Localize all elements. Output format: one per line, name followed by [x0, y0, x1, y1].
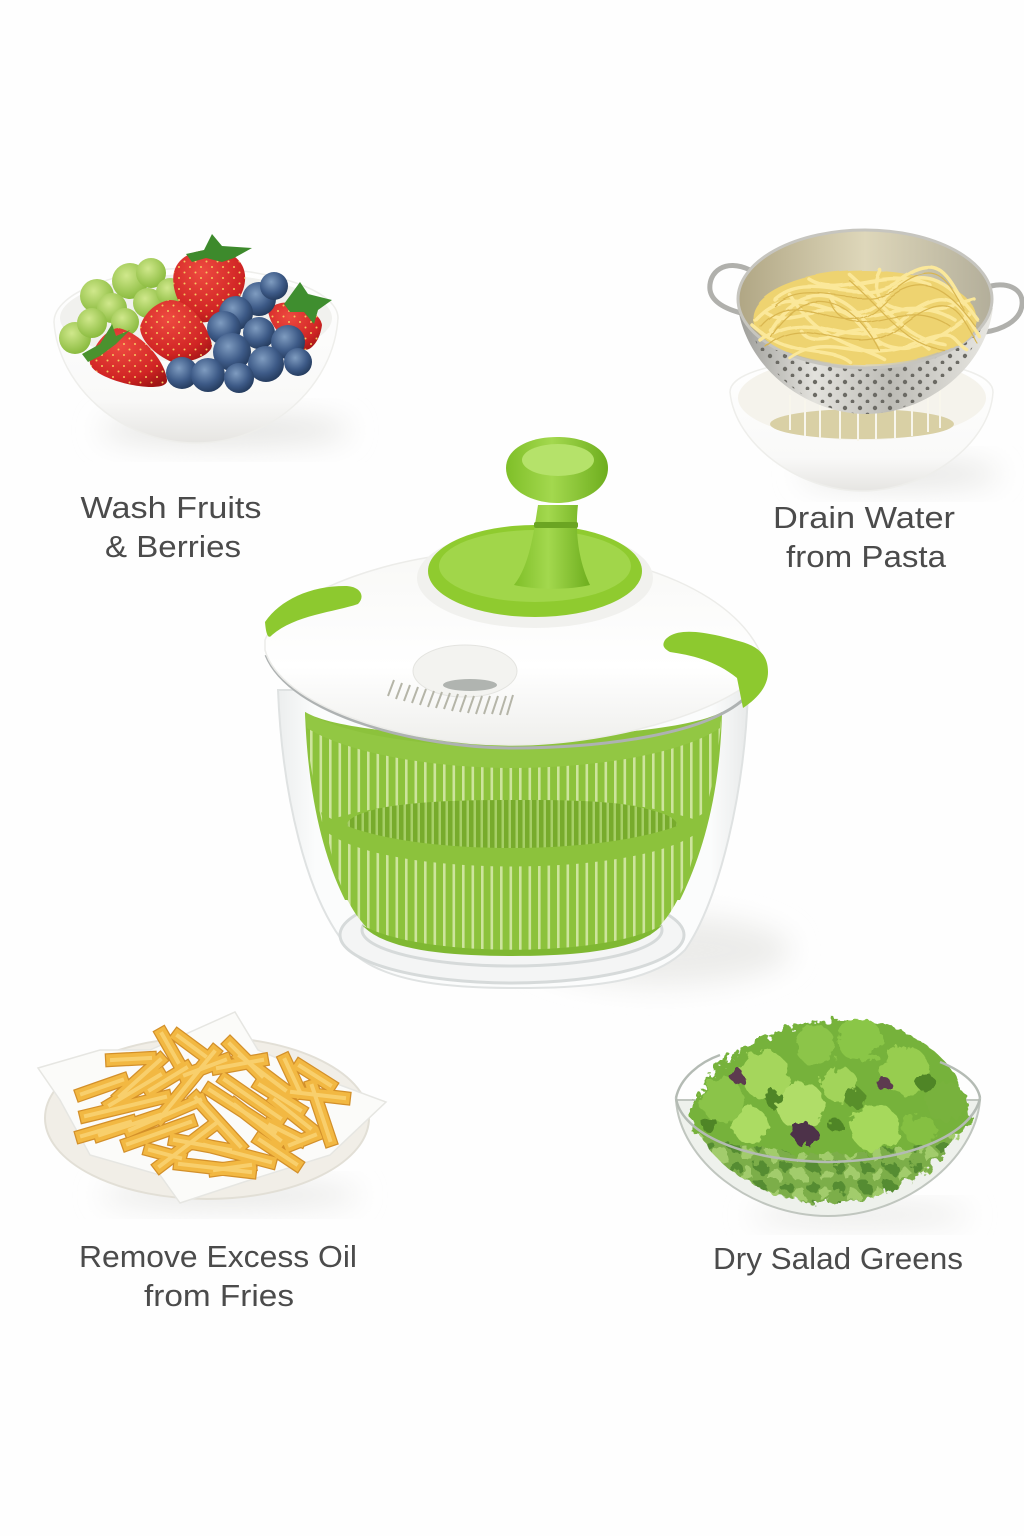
icon: glass bowl body: [676, 1100, 980, 1216]
icon: white plate: [45, 1037, 369, 1199]
icon: colander handles: [710, 266, 1022, 332]
icon: bowl inner rim: [60, 274, 332, 362]
icon: white lid: [265, 550, 765, 745]
icon: top rim band: [305, 712, 722, 768]
icon: clear outer bowl: [278, 690, 748, 988]
icon: lower ribs: [327, 832, 698, 952]
icon: lid vent slots: [388, 680, 513, 715]
icon: spaghetti: [752, 267, 978, 365]
text: remove excess oil label: Remove Excess Oil: [79, 1239, 357, 1274]
icon: middle solid band: [321, 812, 705, 872]
text: drain water label: Drain Water: [773, 500, 955, 535]
icon: lid pour spout: [413, 645, 517, 697]
text: drain water label: from Pasta: [786, 539, 947, 574]
panel: dry salad greens: [676, 1018, 980, 1276]
icon: shadow under pasta bowl: [800, 460, 1000, 488]
icon: water drips: [790, 390, 940, 441]
panel: wash fruits and berries: [54, 234, 350, 564]
icon: strawberry right leaves: [284, 282, 332, 324]
icon: basket back wall: [305, 712, 722, 900]
icon: lid disc recess: [417, 528, 653, 628]
icon: shadow under plate: [100, 1183, 360, 1207]
icon: lettuce pile: [690, 1018, 970, 1154]
icon: blueberries: [166, 272, 312, 393]
icon: clear bowl base: [340, 887, 684, 983]
icon: bowl rim ring: [266, 655, 748, 748]
icon: right green clip: [663, 632, 768, 708]
text: remove excess oil label: from Fries: [144, 1278, 294, 1313]
icon: basket inner floor: [347, 797, 677, 853]
icon: bowl inner: [738, 356, 986, 440]
icon: fries: [82, 1034, 344, 1172]
icon: white catch bowl: [730, 358, 993, 491]
panel: remove excess oil from fries: [38, 1012, 386, 1313]
icon: knob highlight: [522, 444, 594, 476]
icon: stem collar: [534, 522, 578, 528]
icon: upper ribs: [305, 712, 722, 822]
icon: glass rim: [676, 1055, 980, 1162]
icon: pump knob stem: [514, 505, 590, 589]
icon: green grapes: [59, 258, 184, 354]
icon: colander rim: [738, 230, 992, 368]
icon: white fruit bowl: [54, 268, 338, 443]
icon: strawberry top: [173, 250, 245, 322]
icon: shadow under fruit bowl: [100, 414, 350, 446]
icon: basket bottom rim: [362, 925, 662, 956]
icon: disc highlight: [439, 530, 631, 602]
icon: strawberry leaves top: [186, 234, 252, 262]
icon: strawberry front leaves: [82, 324, 130, 362]
infographic canvas: [37, 228, 1024, 1306]
icon: spinner shadow: [530, 915, 790, 985]
text: wash fruits label: Wash Fruits: [80, 490, 262, 525]
icon: steel colander body: [738, 308, 993, 414]
icon: greens through glass: [700, 1130, 960, 1203]
icon: left green clip: [265, 586, 362, 637]
icon: colander perforations: [756, 330, 981, 414]
text: dry salad greens label: Dry Salad Greens: [713, 1241, 963, 1276]
text: wash fruits label: [80, 490, 262, 564]
icon: strawberry centre: [140, 300, 212, 362]
panel: salad spinner product: [265, 437, 790, 988]
icon: strawberry right: [268, 302, 322, 350]
panel: drain water from pasta: [710, 230, 1022, 574]
icon: strawberry front: [90, 328, 167, 387]
icon: shadow under glass bowl: [750, 1205, 970, 1225]
icon: pump knob head: [506, 437, 608, 503]
text: drain water label: [773, 500, 955, 574]
icon: green basket: [305, 712, 722, 956]
text: remove excess oil label: [79, 1239, 357, 1313]
icon: paper towel: [38, 1012, 386, 1203]
icon: drained water: [770, 409, 954, 439]
icon: spout window: [443, 679, 497, 691]
text: wash fruits label: & Berries: [105, 529, 241, 564]
icon: green lid disc: [428, 525, 642, 617]
